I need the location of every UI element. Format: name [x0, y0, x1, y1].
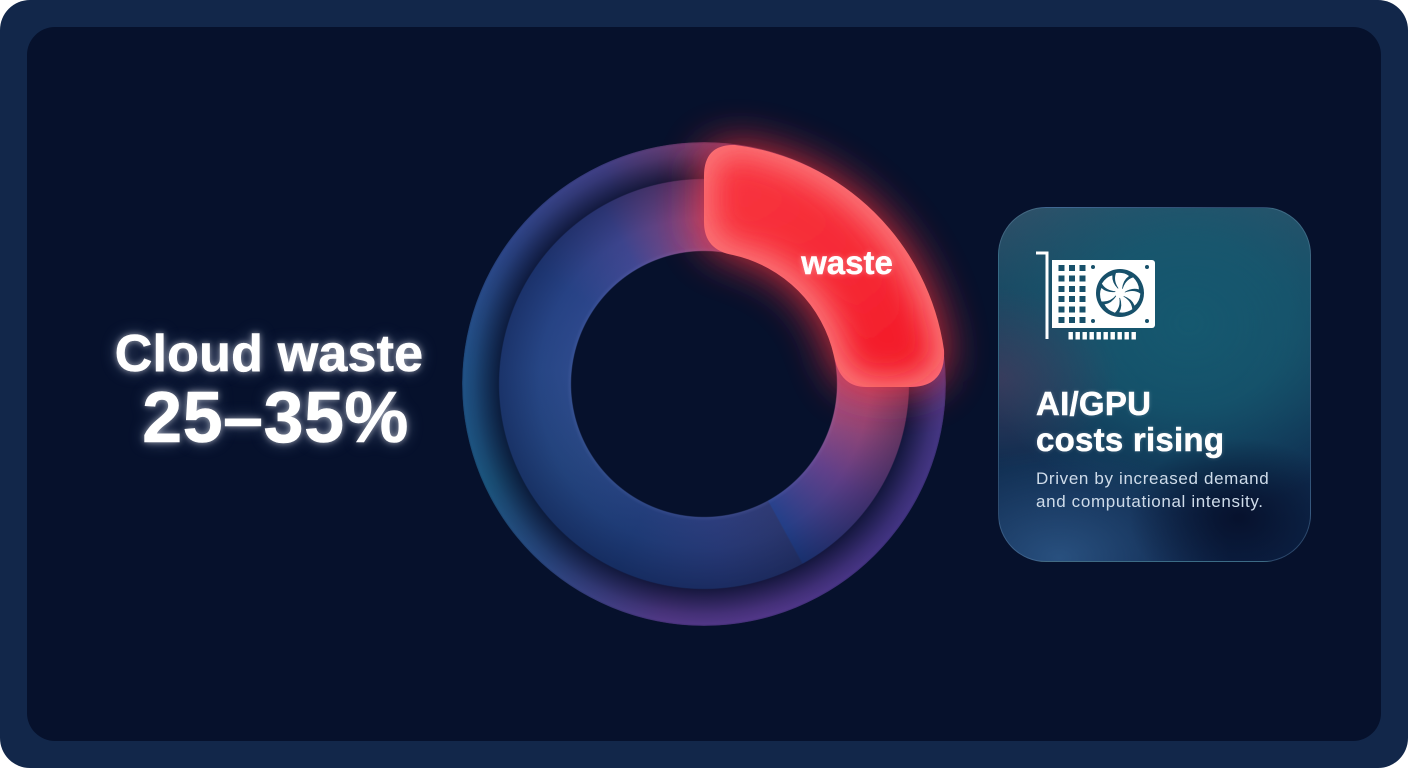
red waste segment: [669, 111, 978, 422]
glass card: AI/GPU costs: [998, 207, 1311, 562]
headline: cloud waste stat: 25–35%: [142, 378, 409, 458]
card heading: AI/GPU: [1036, 385, 1151, 422]
icon: GPU card: [1036, 252, 1155, 340]
donut inner ring: [498, 178, 910, 590]
headline: cloud waste stat: Cloud waste: [115, 325, 423, 383]
card description: Driven by increased demand: [1036, 469, 1269, 488]
card description: and computational intensity.: [1036, 492, 1264, 510]
waste label: waste: [801, 244, 893, 281]
card description: [1036, 469, 1269, 510]
card heading: costs rising: [1036, 421, 1224, 458]
donut outer ring: [462, 142, 946, 626]
card heading: [1035, 385, 1224, 460]
headline: cloud waste stat: [110, 325, 428, 458]
